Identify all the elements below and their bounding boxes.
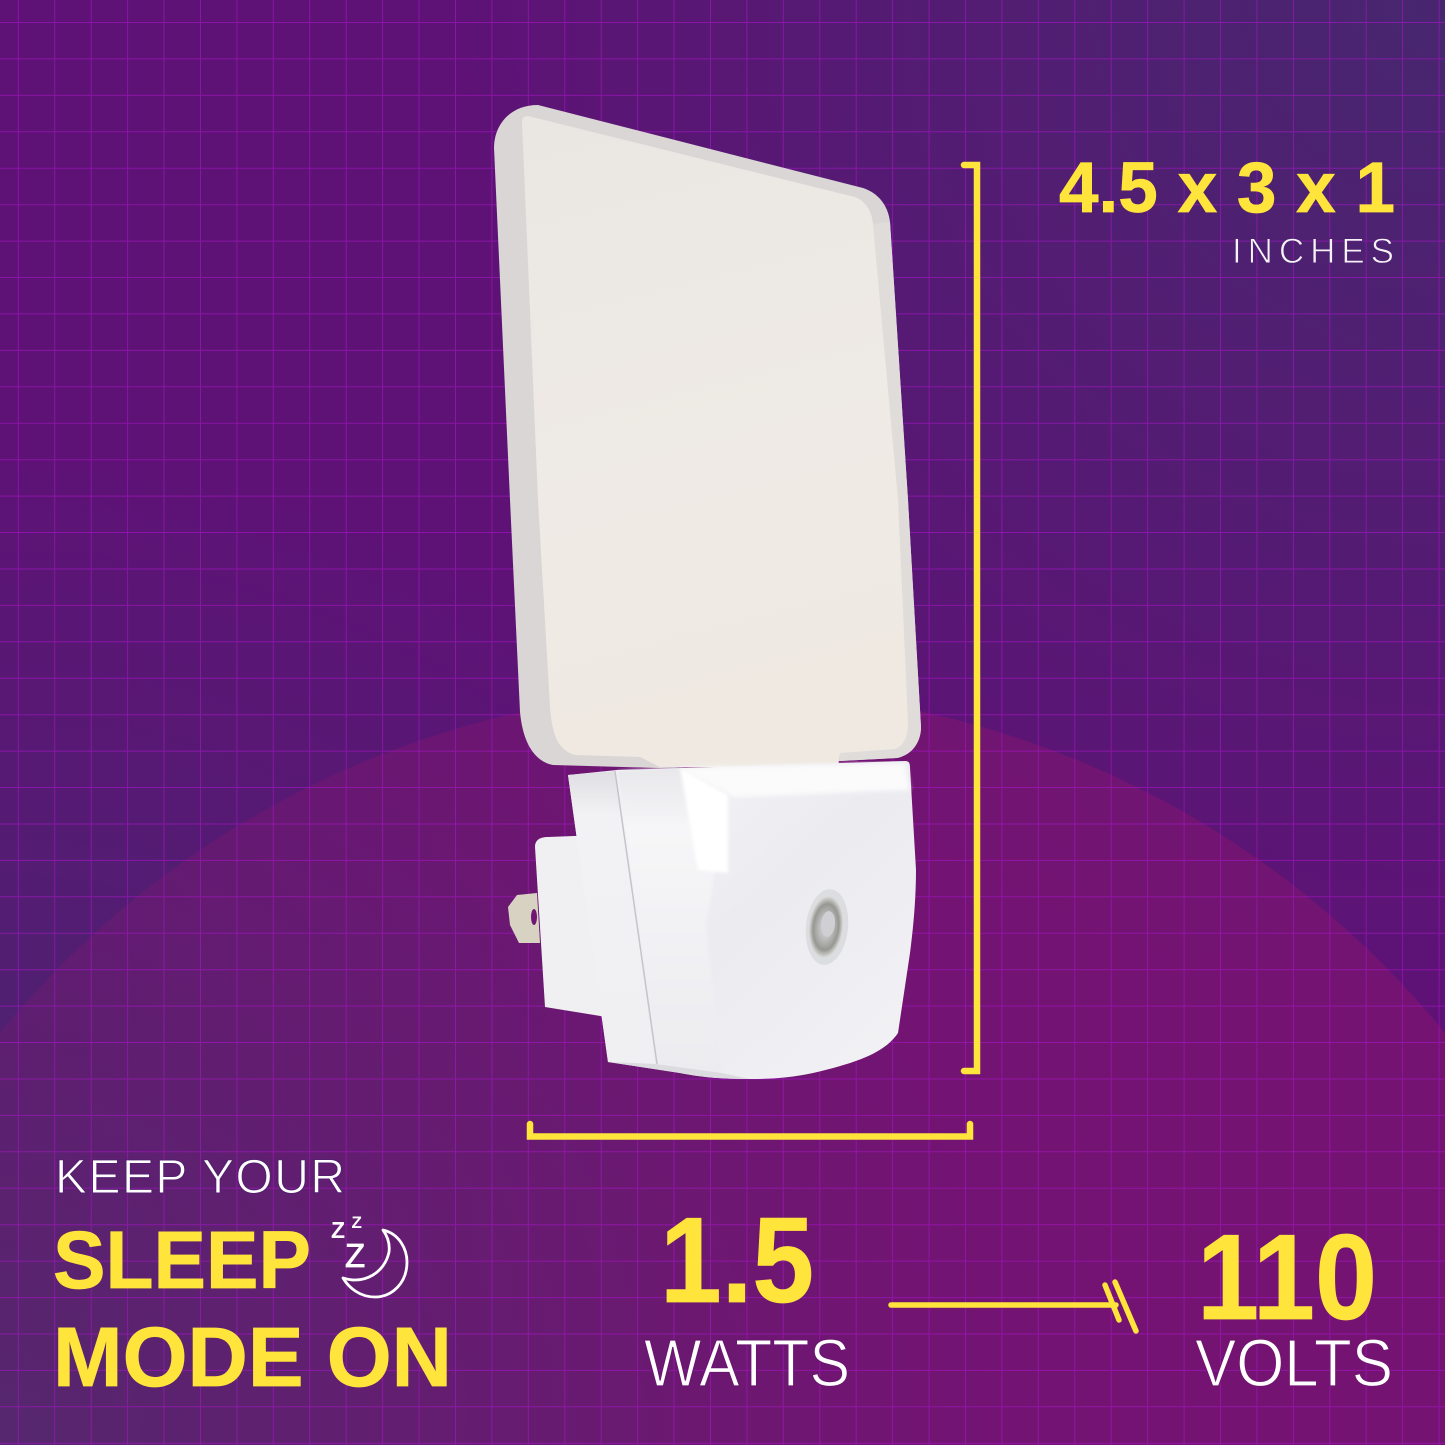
width dimension bracket	[530, 1124, 970, 1136]
sleep heading: SLEEP	[53, 1215, 311, 1306]
inches label: INCHES	[1232, 232, 1394, 271]
dimensions value: 4.5 x 3 x 1	[1059, 149, 1395, 228]
height dimension bracket	[964, 165, 977, 1071]
plug prong	[508, 893, 540, 943]
voltage value: 110	[1197, 1209, 1377, 1345]
volts label: VOLTS	[1195, 1326, 1393, 1401]
mode on heading: MODE ON	[53, 1310, 452, 1404]
keep your label: KEEP YOUR	[55, 1151, 345, 1204]
main housing	[568, 761, 916, 1079]
rear plate	[535, 835, 625, 1020]
icon: moon with zzz: Z	[352, 1213, 362, 1232]
icon: moon with zzz	[331, 1213, 407, 1297]
watts label: WATTS	[644, 1326, 850, 1401]
icon: moon with zzz: Z	[345, 1237, 365, 1274]
light sensor	[802, 887, 852, 967]
lamp shade panel	[494, 105, 921, 768]
wattage value: 1.5	[660, 1192, 814, 1328]
icon: moon with zzz: Z	[331, 1217, 345, 1243]
arrow: watts to volts	[891, 1282, 1136, 1331]
product: plug-in night light	[494, 105, 921, 1079]
